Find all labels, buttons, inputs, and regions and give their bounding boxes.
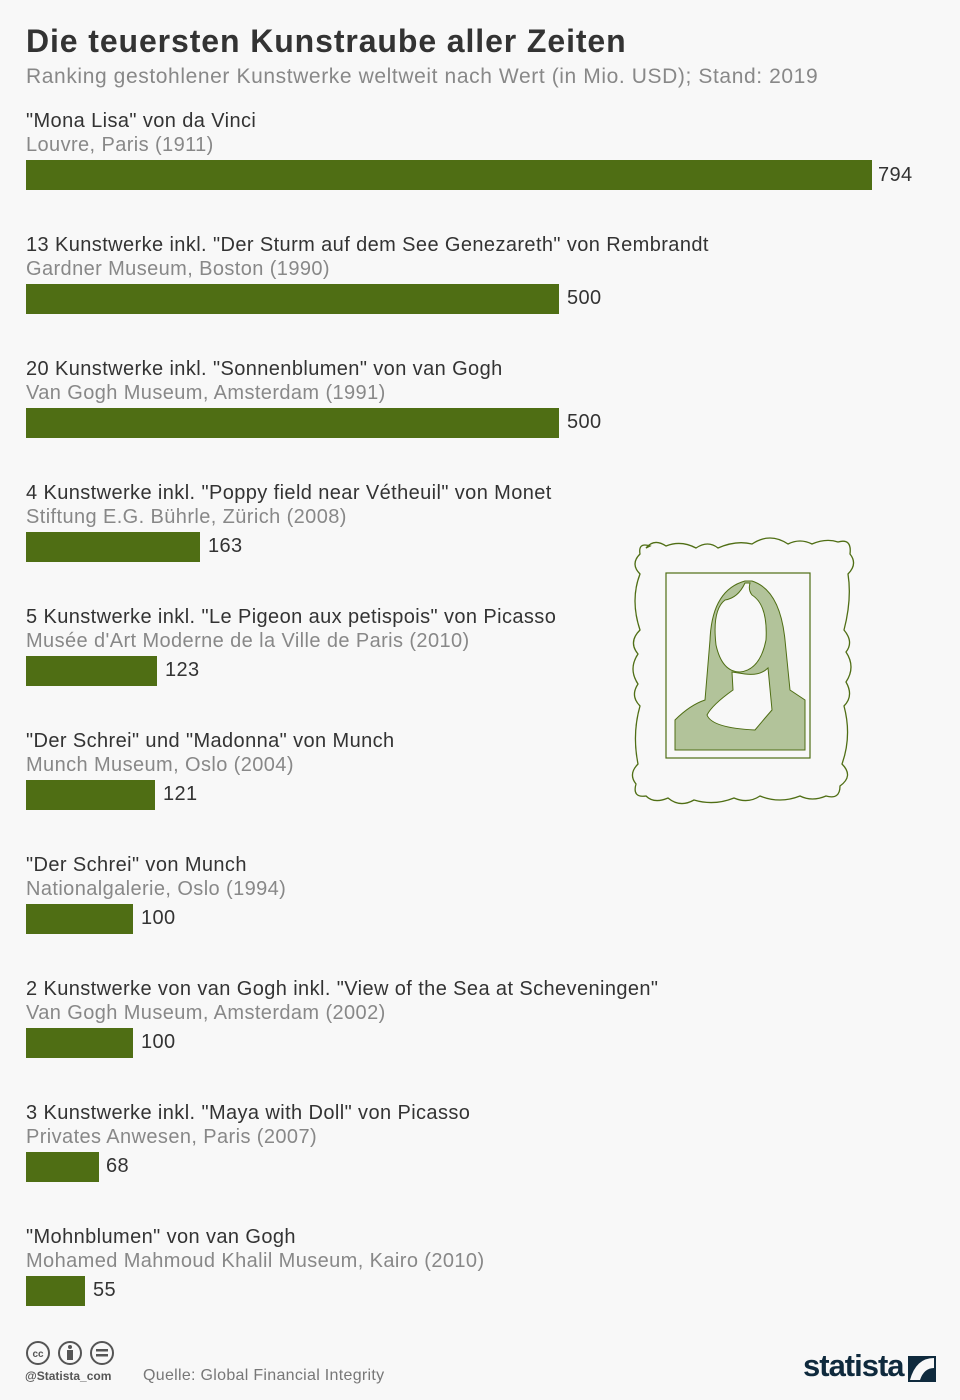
entry: Mohnblumen: "Mohnblumen" von van Gogh	[26, 1226, 296, 1248]
entry: van Gogh Scheveningen: 100	[141, 1031, 176, 1053]
entry: Monet: 163	[208, 535, 243, 557]
entry: Rembrandt	[26, 234, 709, 314]
entry: Picasso Pigeon: 5 Kunstwerke inkl. "Le Pigeon aux petispois" von Picasso	[26, 606, 556, 628]
entry: Picasso Maya	[26, 1102, 470, 1182]
entry: Picasso Pigeon: Musée d'Art Moderne de la Ville de Paris (2010)	[26, 630, 470, 652]
entry: Mona Lisa: "Mona Lisa" von da Vinci	[26, 110, 256, 132]
entry: Munch Schrei: 100	[141, 907, 176, 929]
entry: Picasso Maya: Privates Anwesen, Paris (2007)	[26, 1126, 317, 1148]
entry: Monet: 4 Kunstwerke inkl. "Poppy field near Vétheuil" von Monet	[26, 482, 552, 504]
entry: van Gogh Scheveningen: Van Gogh Museum, Amsterdam (2002)	[26, 1002, 386, 1024]
entry: Sonnenblumen: 20 Kunstwerke inkl. "Sonnenblumen" von van Gogh	[26, 358, 503, 380]
entry: Rembrandt: 500	[567, 287, 602, 309]
entry: Sonnenblumen	[26, 358, 602, 438]
entry: Mona Lisa	[26, 110, 913, 190]
entry: Sonnenblumen: Van Gogh Museum, Amsterdam (1991)	[26, 382, 386, 404]
entry: Picasso Pigeon: 123	[165, 659, 200, 681]
title: Die teuersten Kunstraube aller Zeiten	[26, 23, 627, 59]
entry: Rembrandt: Gardner Museum, Boston (1990)	[26, 258, 330, 280]
entry: Mohnblumen: Mohamed Mahmoud Khalil Museum, Kairo (2010)	[26, 1250, 485, 1272]
entry: Munch Schrei Madonna: Munch Museum, Oslo (2004)	[26, 754, 294, 776]
entry: Picasso Maya: 3 Kunstwerke inkl. "Maya with Doll" von Picasso	[26, 1102, 470, 1124]
icon: Mona Lisa frame	[632, 537, 854, 804]
footer: cc icons	[26, 1341, 114, 1365]
entry: Sonnenblumen: 500	[567, 411, 602, 433]
footer: source: Quelle: Global Financial Integrity	[143, 1367, 384, 1384]
entry: van Gogh Scheveningen: 2 Kunstwerke von van Gogh inkl. "View of the Sea at Scheveningen"	[26, 978, 658, 1000]
entry: Munch Schrei: "Der Schrei" von Munch	[26, 854, 247, 876]
footer: cc icons: cc	[32, 1349, 44, 1360]
entry: Munch Schrei	[26, 854, 286, 934]
footer: handle: @Statista_com	[25, 1369, 111, 1383]
entry: Mohnblumen: 55	[93, 1279, 116, 1301]
entry: Picasso Pigeon	[26, 606, 556, 686]
entry: van Gogh Scheveningen	[26, 978, 658, 1058]
entry: Munch Schrei Madonna: 121	[163, 783, 198, 805]
entry: Mona Lisa: Louvre, Paris (1911)	[26, 134, 214, 156]
entry: Monet: Stiftung E.G. Bührle, Zürich (2008)	[26, 506, 347, 528]
entry: Munch Schrei Madonna: "Der Schrei" und "Madonna" von Munch	[26, 730, 395, 752]
entry: Monet	[26, 482, 552, 562]
entry: Mona Lisa: 794	[878, 164, 913, 186]
entry: Munch Schrei: Nationalgalerie, Oslo (1994)	[26, 878, 286, 900]
entry: Rembrandt: 13 Kunstwerke inkl. "Der Sturm auf dem See Genezareth" von Rembrandt	[26, 234, 709, 256]
entry: Munch Schrei Madonna	[26, 730, 395, 810]
logo: statista: statista	[803, 1348, 904, 1383]
entry: Picasso Maya: 68	[106, 1155, 129, 1177]
subtitle: Ranking gestohlener Kunstwerke weltweit nach Wert (in Mio. USD); Stand: 2019	[26, 65, 818, 88]
entry: Mohnblumen	[26, 1226, 485, 1306]
